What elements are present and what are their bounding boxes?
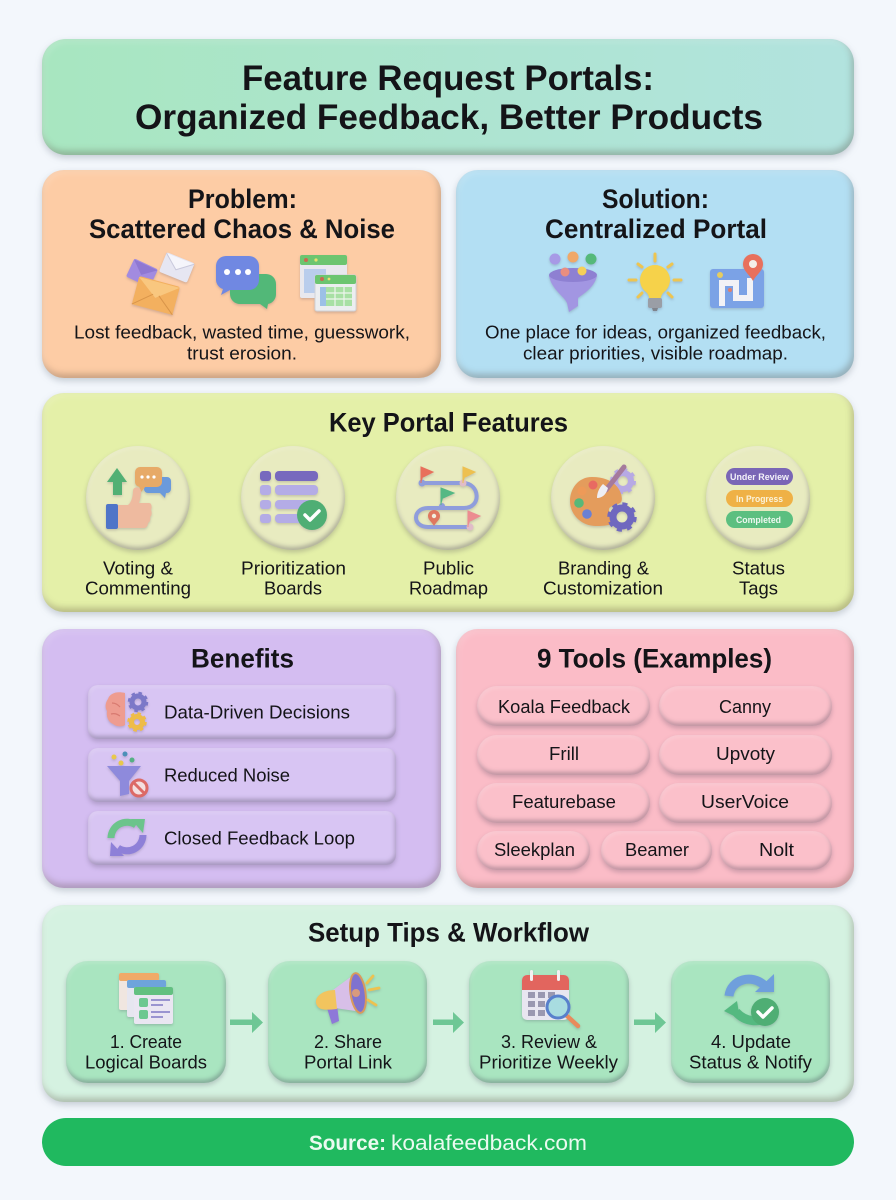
text: solution description: One place for ideas, organized feedback, xyxy=(485,322,826,342)
pill: frill xyxy=(477,735,650,775)
pill: canny: Canny xyxy=(719,697,771,717)
benefit: reduced noise xyxy=(88,748,396,802)
heading: solution xyxy=(545,184,767,244)
heading: problem: Problem: xyxy=(188,184,297,214)
label: step 1: Logical Boards xyxy=(85,1052,207,1072)
icon: funnel with block sign xyxy=(107,752,147,796)
title xyxy=(135,59,763,137)
text: problem description xyxy=(74,322,410,364)
label: step 3: 3. Review & xyxy=(501,1032,597,1052)
icon: spreadsheets xyxy=(300,255,356,311)
feature: status tags xyxy=(706,446,810,598)
icon: prioritized list xyxy=(260,471,327,530)
panel: title banner xyxy=(42,39,854,155)
pill: upvoty xyxy=(659,735,832,775)
icon: chat bubbles xyxy=(216,256,276,309)
label: status tags xyxy=(732,558,785,598)
benefit: closed feedback loop xyxy=(88,811,396,865)
pill: uservoice xyxy=(659,783,832,823)
pill: featurebase: Featurebase xyxy=(512,792,616,812)
label: step 2 xyxy=(304,1032,393,1072)
pill: sleekplan xyxy=(477,831,590,870)
heading: solution: Centralized Portal xyxy=(545,214,767,244)
step 1: create logical boards xyxy=(66,961,226,1083)
pill: sleekplan: Sleekplan xyxy=(494,840,575,860)
label: public roadmap xyxy=(409,558,488,598)
feature: public roadmap xyxy=(396,446,500,598)
step 3: review and prioritize weekly xyxy=(469,961,629,1083)
heading: problem xyxy=(89,184,395,244)
pill: beamer xyxy=(601,831,712,870)
label: reduced noise: Reduced Noise xyxy=(164,766,290,786)
arrow: step 1 to 2 xyxy=(230,1012,263,1033)
panel: benefits xyxy=(42,629,441,888)
text: problem description: trust erosion. xyxy=(187,344,297,364)
heading: setup tips: Setup Tips & Workflow xyxy=(308,918,589,948)
heading: tools: 9 Tools (Examples) xyxy=(537,644,772,674)
label: step 3: Prioritize Weekly xyxy=(479,1052,618,1072)
pill: koala feedback: Koala Feedback xyxy=(498,697,631,717)
arrow: step 3 to 4 xyxy=(634,1012,666,1033)
tag: under review xyxy=(726,468,793,485)
icon: calendar with magnifier xyxy=(522,970,578,1026)
step 4: update status and notify xyxy=(671,961,830,1083)
icon: winding roadmap xyxy=(416,467,480,530)
benefit: data-driven decisions xyxy=(88,685,396,739)
tag: under review: Under Review xyxy=(730,472,790,483)
label: branding and customization: Customization xyxy=(543,578,663,598)
icon: brain and gears xyxy=(106,692,147,730)
source text xyxy=(309,1132,587,1155)
label: step 4: Status & Notify xyxy=(689,1052,812,1072)
label: voting and commenting: Commenting xyxy=(85,578,191,598)
pill: beamer: Beamer xyxy=(625,840,689,860)
label: branding and customization xyxy=(543,558,663,598)
panel: key portal features xyxy=(42,393,854,612)
feature: branding and customization xyxy=(543,446,663,598)
label: step 4: 4. Update xyxy=(711,1032,791,1052)
heading: solution: Solution: xyxy=(602,184,709,214)
label: voting and commenting xyxy=(85,558,191,598)
tag: completed xyxy=(726,511,793,528)
icon: map with pin xyxy=(710,254,764,308)
text: problem description: Lost feedback, wasted time, guesswork, xyxy=(74,322,410,342)
label: prioritization boards xyxy=(241,558,346,598)
heading: key portal features: Key Portal Features xyxy=(329,408,568,438)
label: data-driven decisions: Data-Driven Decisions xyxy=(164,702,350,722)
label: public roadmap: Public xyxy=(423,558,474,578)
pill: nolt: Nolt xyxy=(759,840,794,860)
label: step 2: Portal Link xyxy=(304,1052,393,1072)
label: prioritization boards: Prioritization xyxy=(241,558,346,578)
heading: benefits: Benefits xyxy=(191,644,294,674)
label: status tags: Status xyxy=(732,558,785,578)
text: solution description: clear priorities, visible roadmap. xyxy=(523,344,788,364)
feature: voting and commenting xyxy=(85,446,191,598)
label: branding and customization: Branding & xyxy=(558,558,649,578)
source bar xyxy=(42,1118,854,1166)
arrow: step 2 to 3 xyxy=(433,1012,464,1033)
panel: solution xyxy=(456,170,854,378)
icon: funnel xyxy=(549,252,597,312)
icon: loop arrows xyxy=(110,819,145,856)
label: step 3 xyxy=(479,1032,618,1072)
label: prioritization boards: Boards xyxy=(264,578,322,598)
tag: in progress xyxy=(726,490,793,507)
source text: Source: xyxy=(309,1132,386,1155)
label: step 2: 2. Share xyxy=(314,1032,382,1052)
label: status tags: Tags xyxy=(739,578,778,598)
panel: setup tips and workflow xyxy=(42,905,854,1102)
label: step 1 xyxy=(85,1032,207,1072)
tag: in progress: In Progress xyxy=(736,494,783,505)
icon: light bulb xyxy=(629,254,681,311)
icon: envelopes xyxy=(126,252,195,315)
label: closed feedback loop: Closed Feedback Loop xyxy=(164,828,355,848)
title: Organized Feedback, Better Products xyxy=(135,98,763,137)
panel: problem xyxy=(42,170,441,378)
icon: palette and gears xyxy=(570,467,635,530)
source text: koalafeedback.com xyxy=(391,1132,587,1155)
pill: featurebase xyxy=(477,783,650,823)
icon: stacked boards xyxy=(119,973,173,1024)
label: step 1: 1. Create xyxy=(110,1032,182,1052)
pill: uservoice: UserVoice xyxy=(701,792,789,812)
step 2: share portal link xyxy=(268,961,427,1083)
pill: nolt xyxy=(720,831,832,870)
text: solution description xyxy=(485,322,826,364)
icon: voting xyxy=(106,467,171,529)
label: voting and commenting: Voting & xyxy=(103,558,173,578)
title: Feature Request Portals: xyxy=(242,59,654,98)
label: step 4 xyxy=(689,1032,812,1072)
heading: problem: Scattered Chaos & Noise xyxy=(89,214,395,244)
feature: prioritization boards xyxy=(241,446,346,598)
pill: frill: Frill xyxy=(549,744,579,764)
panel: tools xyxy=(456,629,854,888)
pill: upvoty: Upvoty xyxy=(716,744,775,764)
tag: completed: Completed xyxy=(736,515,781,526)
pill: canny xyxy=(659,686,832,726)
label: public roadmap: Roadmap xyxy=(409,578,488,598)
pill: koala feedback xyxy=(477,686,650,726)
icon: megaphone xyxy=(316,972,379,1024)
icon: update arrows with check xyxy=(724,974,779,1026)
